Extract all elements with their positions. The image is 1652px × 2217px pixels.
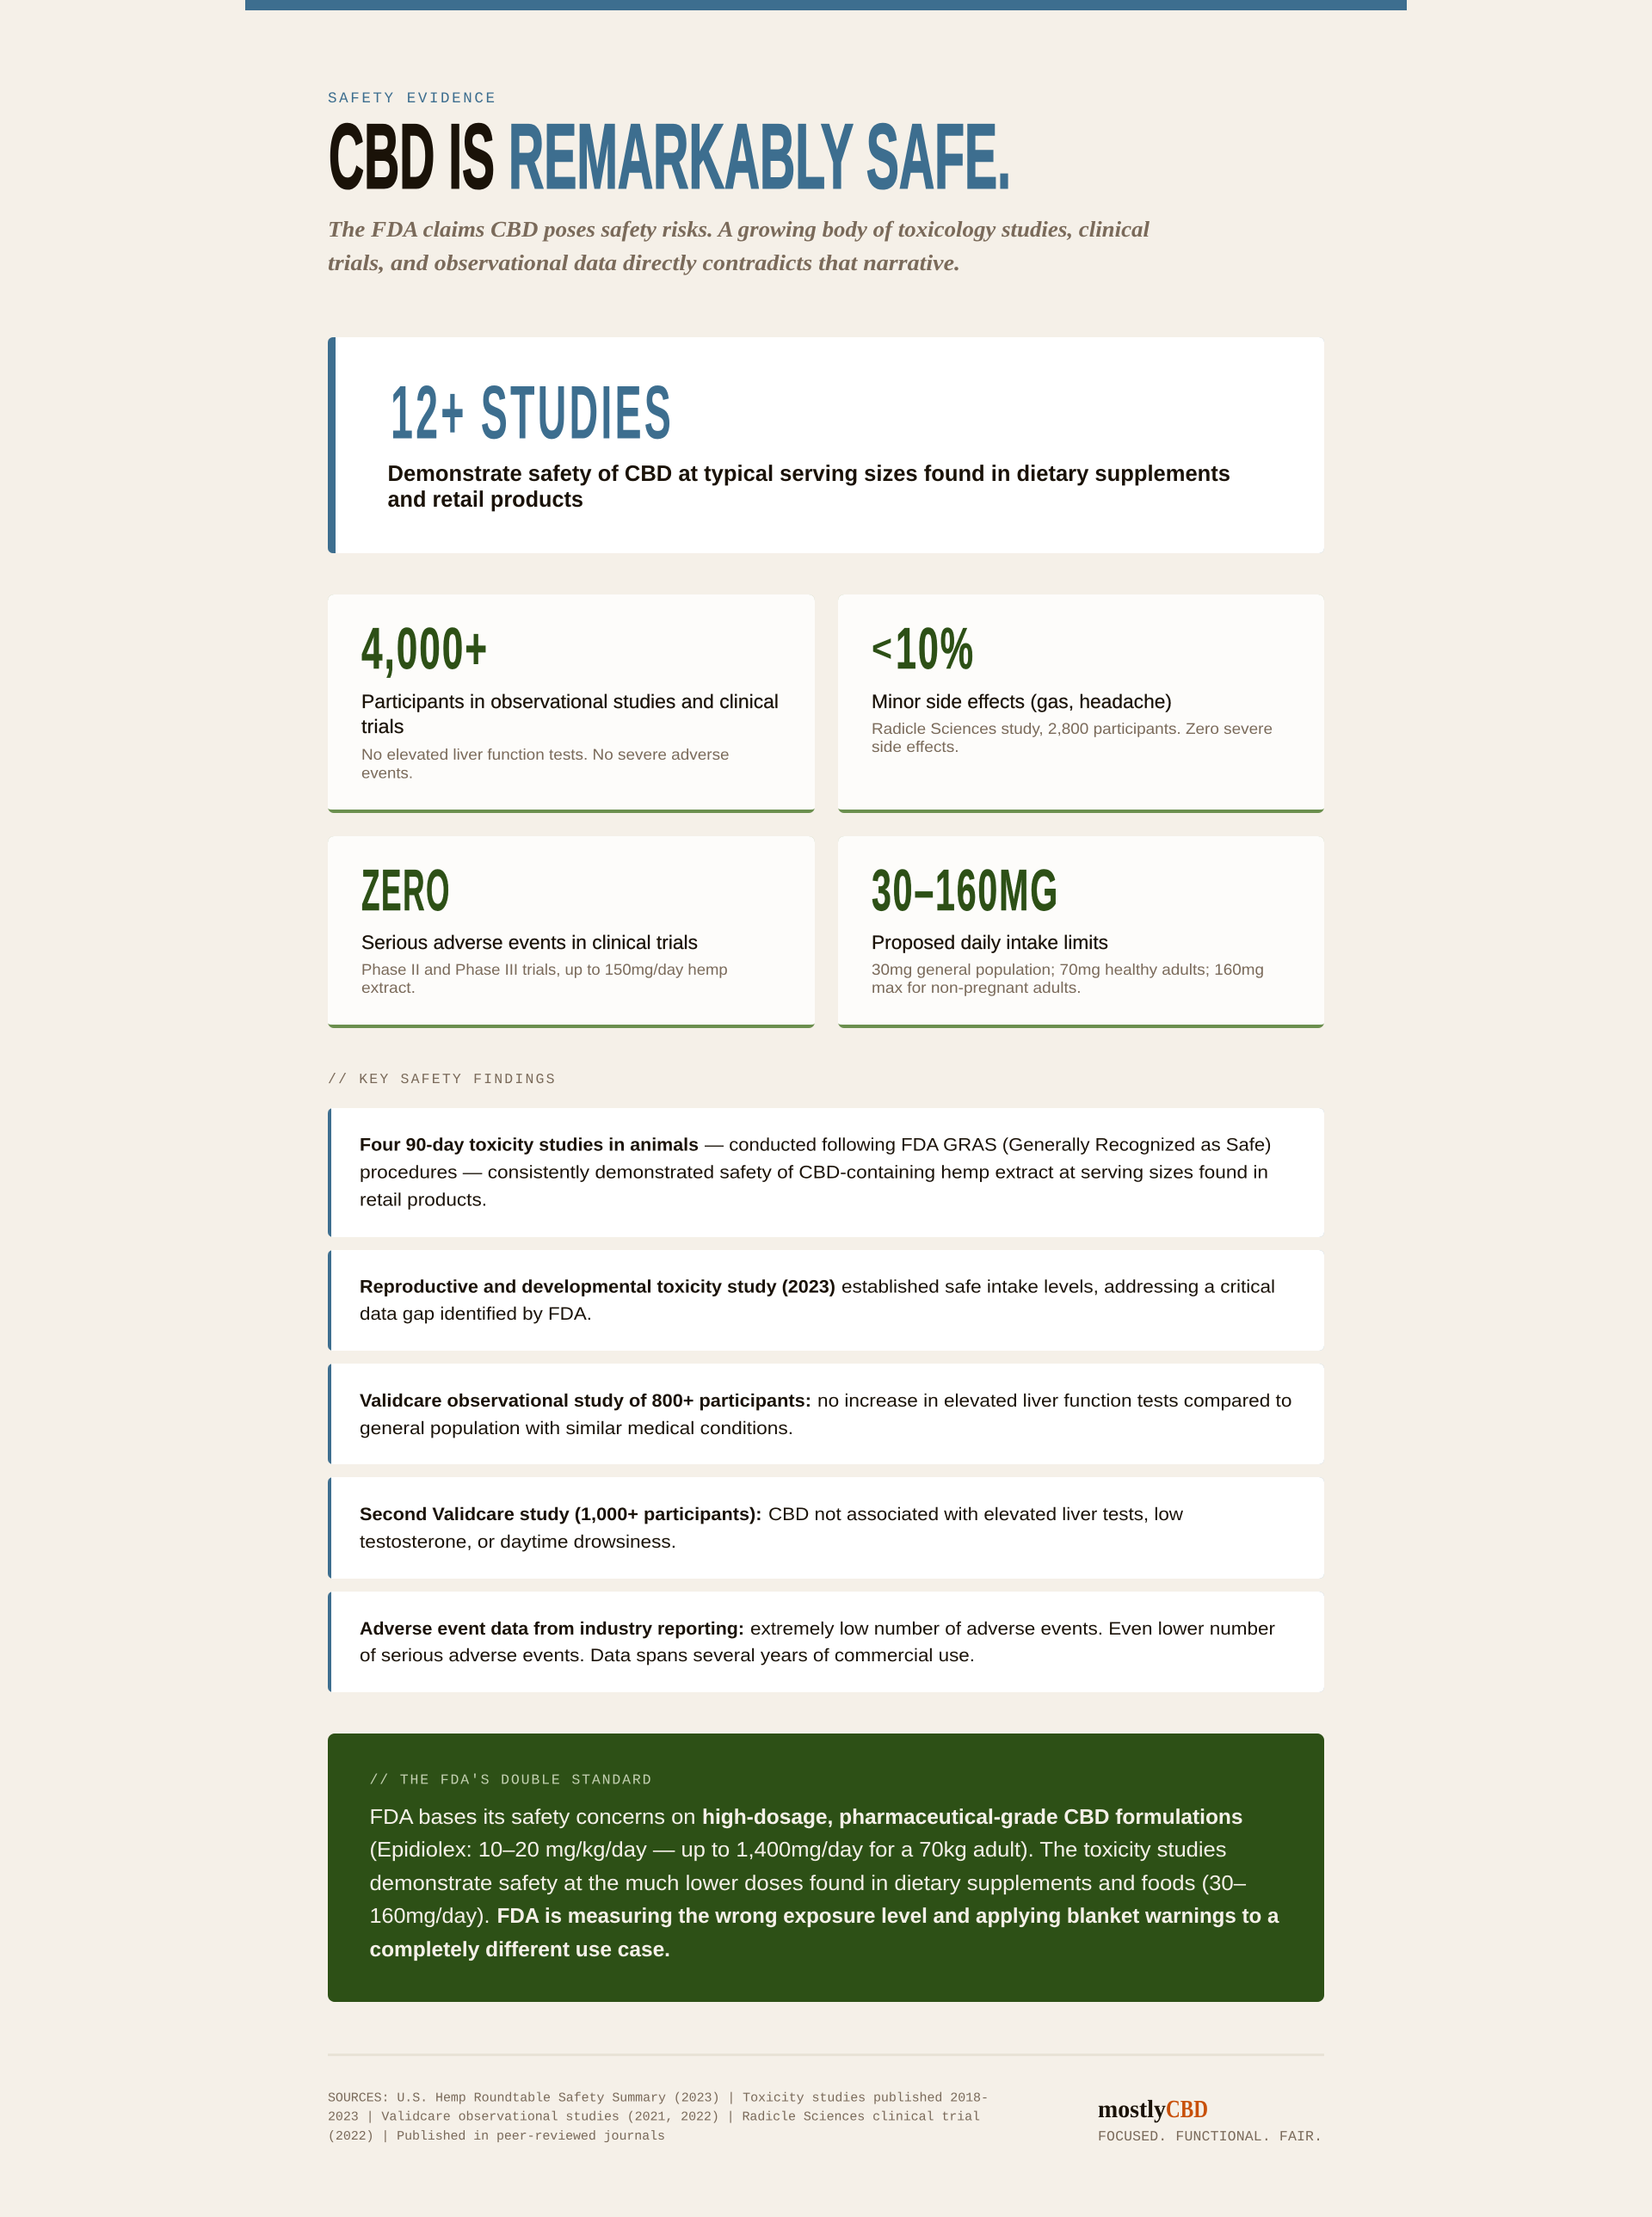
stat label: trials [361, 716, 404, 737]
finding: adverse event data [328, 1592, 1324, 1692]
title [329, 105, 1011, 208]
stat label: Proposed daily intake limits [872, 932, 1108, 953]
section heading: key safety findings: // KEY SAFETY FINDINGS [328, 1071, 555, 1087]
sources [328, 2091, 989, 2144]
stat number: 4,000+ [361, 616, 489, 681]
stat detail [872, 720, 1273, 755]
title: CBD IS [329, 105, 495, 208]
stat detail: side effects. [872, 738, 959, 755]
callout body: FDA is measuring the wrong exposure level and applying blanket warnings to a [497, 1905, 1279, 1928]
callout body: completely different use case. [370, 1938, 670, 1961]
stat number: < [872, 628, 892, 669]
stat detail: Phase II and Phase III trials, up to 150mg/day hemp [361, 961, 728, 978]
callout body: (Epidiolex: 10–20 mg/kg/day — up to 1,400mg/day for a 70kg adult). The toxicity studies [370, 1838, 1227, 1862]
finding: animal toxicity studies: retail products. [360, 1191, 487, 1210]
callout body [370, 1806, 1279, 1961]
finding: animal toxicity studies: procedures — consistently demonstrated safety of CBD-containing hemp extract at serving sizes found in [360, 1163, 1268, 1182]
subtitle: The FDA claims CBD poses safety risks. A growing body of toxicology studies, clinical [328, 217, 1150, 242]
stat label: Participants in observational studies and clinical [361, 691, 779, 712]
panel: stat card 30-160mg [838, 836, 1324, 1028]
hero description: and retail products [387, 486, 583, 512]
callout label: // THE FDA'S DOUBLE STANDARD [370, 1772, 651, 1788]
stat detail: events. [361, 764, 413, 781]
brand logo: CBD [1166, 2096, 1208, 2123]
subtitle: trials, and observational data directly contradicts that narrative. [328, 250, 960, 275]
stat label [361, 691, 779, 737]
finding: validcare 1,000+: testosterone, or daytime drowsiness. [360, 1532, 676, 1552]
stat detail [361, 746, 730, 781]
stat detail: extract. [361, 979, 416, 996]
finding: reproductive study: established safe intake levels, addressing a critical [841, 1277, 1275, 1297]
finding: validcare 1,000+: CBD not associated with elevated liver tests, low [768, 1505, 1184, 1524]
sources: 2023 | Validcare observational studies (2021, 2022) | Radicle Sciences clinical trial [328, 2109, 980, 2125]
stat label: Serious adverse events in clinical trials [361, 932, 698, 953]
finding: validcare 800+: no increase in elevated liver function tests compared to [817, 1391, 1291, 1411]
panel: hero stat 12+ studies [328, 337, 1324, 553]
brand logo: mostly [1098, 2096, 1166, 2123]
stat detail: No elevated liver function tests. No severe adverse [361, 746, 730, 763]
finding: reproductive study: data gap identified by FDA. [360, 1304, 592, 1324]
panel: FDA double standard callout [328, 1734, 1324, 2002]
stat detail [361, 961, 728, 996]
stat label: Minor side effects (gas, headache) [872, 691, 1172, 712]
sources: (2022) | Published in peer-reviewed journals [328, 2129, 665, 2144]
finding: adverse event data: Adverse event data from industry reporting: [360, 1619, 744, 1639]
title: REMARKABLY SAFE. [509, 105, 1011, 208]
stat detail: 30mg general population; 70mg healthy adults; 160mg [872, 961, 1264, 978]
finding: adverse event data: of serious adverse events. Data spans several years of commercial use. [360, 1646, 975, 1666]
sources: SOURCES: U.S. Hemp Roundtable Safety Summary (2023) | Toxicity studies published 2018- [328, 2091, 989, 2106]
finding: validcare 1,000+: Second Validcare study (1,000+ participants): [360, 1505, 762, 1524]
finding: validcare 1,000+ [328, 1477, 1324, 1579]
panel: stat card under 10% [838, 594, 1324, 813]
finding: animal toxicity studies: Four 90-day toxicity studies in animals [360, 1136, 699, 1155]
stat number: ZERO [361, 858, 451, 923]
stat detail [872, 961, 1264, 996]
hero description: Demonstrate safety of CBD at typical serving sizes found in dietary supplements [387, 460, 1230, 486]
finding: reproductive study: Reproductive and developmental toxicity study (2023) [360, 1277, 835, 1297]
finding: animal toxicity studies [328, 1108, 1324, 1237]
top accent bar [245, 0, 1407, 10]
finding: validcare 800+: Validcare observational study of 800+ participants: [360, 1391, 811, 1411]
header [328, 90, 1150, 275]
finding: adverse event data: extremely low number of adverse events. Even lower number [750, 1619, 1275, 1639]
finding: validcare 800+ [328, 1364, 1324, 1464]
stat number: 10% [896, 616, 975, 681]
callout body: high-dosage, pharmaceutical-grade CBD formulations [702, 1806, 1242, 1829]
stat detail: max for non-pregnant adults. [872, 979, 1082, 996]
callout body: FDA bases its safety concerns on [370, 1806, 695, 1829]
stat number: 30–160MG [872, 858, 1059, 923]
stat detail: Radicle Sciences study, 2,800 participants. Zero severe [872, 720, 1273, 737]
hero number: 12+ STUDIES [391, 370, 674, 454]
brand logo [1098, 2096, 1208, 2123]
hero description [387, 460, 1230, 512]
stat number [872, 616, 975, 681]
finding: validcare 800+: general population with similar medical conditions. [360, 1419, 793, 1438]
brand tagline: FOCUSED. FUNCTIONAL. FAIR. [1098, 2128, 1322, 2145]
finding: animal toxicity studies: — conducted following FDA GRAS (Generally Recognized as Safe) [705, 1136, 1272, 1155]
eyebrow: SAFETY EVIDENCE [328, 90, 495, 108]
panel: stat card zero [328, 836, 815, 1028]
finding: reproductive study [328, 1250, 1324, 1351]
panel: stat card 4,000+ [328, 594, 815, 813]
callout body: 160mg/day). [370, 1905, 490, 1928]
subtitle [328, 217, 1150, 275]
callout body: demonstrate safety at the much lower doses found in dietary supplements and foods (30– [370, 1872, 1246, 1895]
